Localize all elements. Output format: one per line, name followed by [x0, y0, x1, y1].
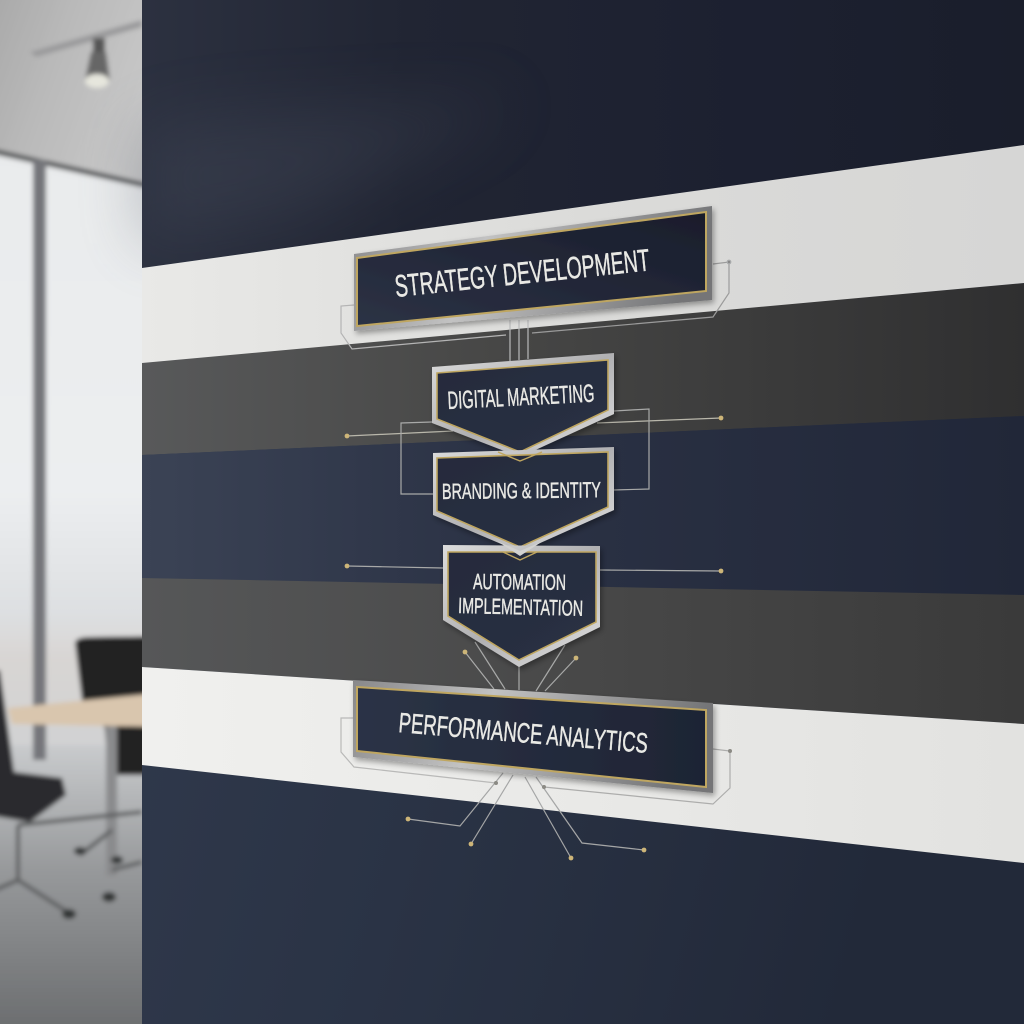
- navy band: [142, 416, 1024, 595]
- upper wall section: [142, 0, 1024, 268]
- window column: [33, 160, 46, 760]
- window panes: [0, 150, 170, 770]
- window frame head: [0, 143, 170, 193]
- floor: [0, 745, 170, 1024]
- grey band lower: [142, 578, 1024, 724]
- white band top: [142, 145, 1024, 363]
- connector lines: strategy development: [341, 260, 731, 361]
- chair wheels: [62, 847, 123, 919]
- diagonal light streak: [142, 100, 520, 245]
- conference table: [8, 692, 170, 727]
- plate: strategy development: [354, 206, 712, 331]
- label: DIGITAL MARKETING: [447, 380, 595, 415]
- plate: digital marketing: [432, 353, 614, 457]
- arrow tip overlap: branding point: [497, 541, 543, 560]
- background: blurred office interior: [0, 0, 170, 1024]
- triple vertical link: [510, 320, 528, 361]
- ceiling spot lamp: [85, 38, 110, 88]
- chair base: [0, 812, 142, 915]
- grey band upper: [142, 283, 1024, 455]
- far chair: [75, 636, 170, 775]
- white band bottom: [142, 667, 1024, 863]
- plate: branding and identity: [433, 447, 614, 552]
- label line two: IMPLEMENTATION: [458, 593, 583, 621]
- ceiling light rail: [30, 20, 142, 57]
- label: BRANDING & IDENTITY: [442, 477, 601, 504]
- connector lines: performance analytics: [341, 718, 732, 860]
- near chair: [0, 670, 66, 822]
- ceiling: [0, 0, 170, 190]
- connector lines: automation implementation: [345, 564, 723, 691]
- label: STRATEGY DEVELOPMENT: [393, 242, 651, 304]
- plate: automation implementation: [443, 545, 600, 667]
- blurred scene contents: [0, 0, 170, 1024]
- arrow tip overlap: digital marketing point: [498, 452, 542, 461]
- plate: performance analytics: [353, 680, 713, 793]
- connector lines: digital marketing: [345, 409, 723, 494]
- label line one: AUTOMATION: [473, 569, 566, 595]
- label: PERFORMANCE ANALYTICS: [397, 707, 649, 759]
